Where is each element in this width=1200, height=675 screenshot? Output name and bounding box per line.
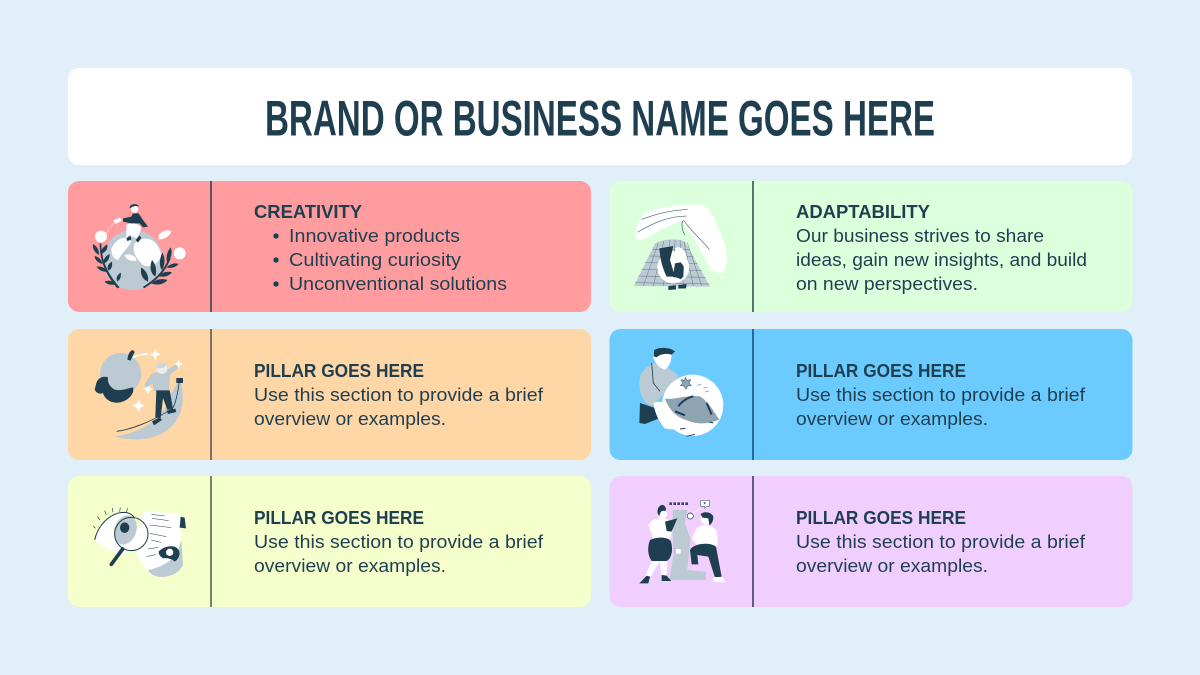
bullet list bbox=[273, 225, 507, 294]
heading: pillar: PILLAR GOES HERE bbox=[254, 507, 424, 528]
body text: Our business strives to share bbox=[796, 225, 1044, 246]
panel: creativity bbox=[68, 181, 591, 312]
panel: adaptability bbox=[610, 181, 1132, 312]
bullet list: Cultivating curiosity bbox=[289, 249, 462, 270]
heading: pillar: PILLAR GOES HERE bbox=[796, 360, 966, 381]
panel: pillar yellow bbox=[68, 476, 591, 607]
icon: eye and magnifier with document bbox=[93, 508, 186, 577]
body text: overview or examples. bbox=[254, 408, 446, 429]
body text bbox=[796, 225, 1087, 294]
body text bbox=[796, 531, 1086, 576]
heading: creativity: CREATIVITY bbox=[254, 201, 363, 222]
body text: Use this section to provide a brief bbox=[254, 531, 544, 552]
heading: pillar: PILLAR GOES HERE bbox=[254, 360, 424, 381]
icon: person on globe with laurels bbox=[93, 204, 186, 290]
heading: adaptability: ADAPTABILITY bbox=[796, 201, 931, 222]
panel: pillar blue bbox=[610, 329, 1132, 460]
body text: overview or examples. bbox=[796, 408, 988, 429]
icon: two people with review tower bbox=[639, 500, 725, 583]
panel: pillar orange bbox=[68, 329, 591, 460]
icon: person holding snow globe bbox=[639, 348, 723, 436]
body text: ideas, gain new insights, and build bbox=[796, 249, 1087, 270]
body text: overview or examples. bbox=[796, 555, 988, 576]
body text bbox=[796, 384, 1086, 429]
body text: on new perspectives. bbox=[796, 273, 978, 294]
body text: overview or examples. bbox=[254, 555, 446, 576]
body text bbox=[254, 384, 544, 429]
body text: Use this section to provide a brief bbox=[796, 531, 1086, 552]
bullet list: Unconventional solutions bbox=[289, 273, 507, 294]
body text: Use this section to provide a brief bbox=[254, 384, 544, 405]
body text bbox=[254, 531, 544, 576]
icon: hand over globe under net bbox=[634, 205, 727, 290]
body text: Use this section to provide a brief bbox=[796, 384, 1086, 405]
title banner bbox=[68, 68, 1132, 165]
panel: pillar purple bbox=[610, 476, 1132, 607]
icon: person with apple and moon bbox=[95, 349, 183, 439]
heading: pillar: PILLAR GOES HERE bbox=[796, 507, 966, 528]
bullet list: Innovative products bbox=[289, 225, 460, 246]
